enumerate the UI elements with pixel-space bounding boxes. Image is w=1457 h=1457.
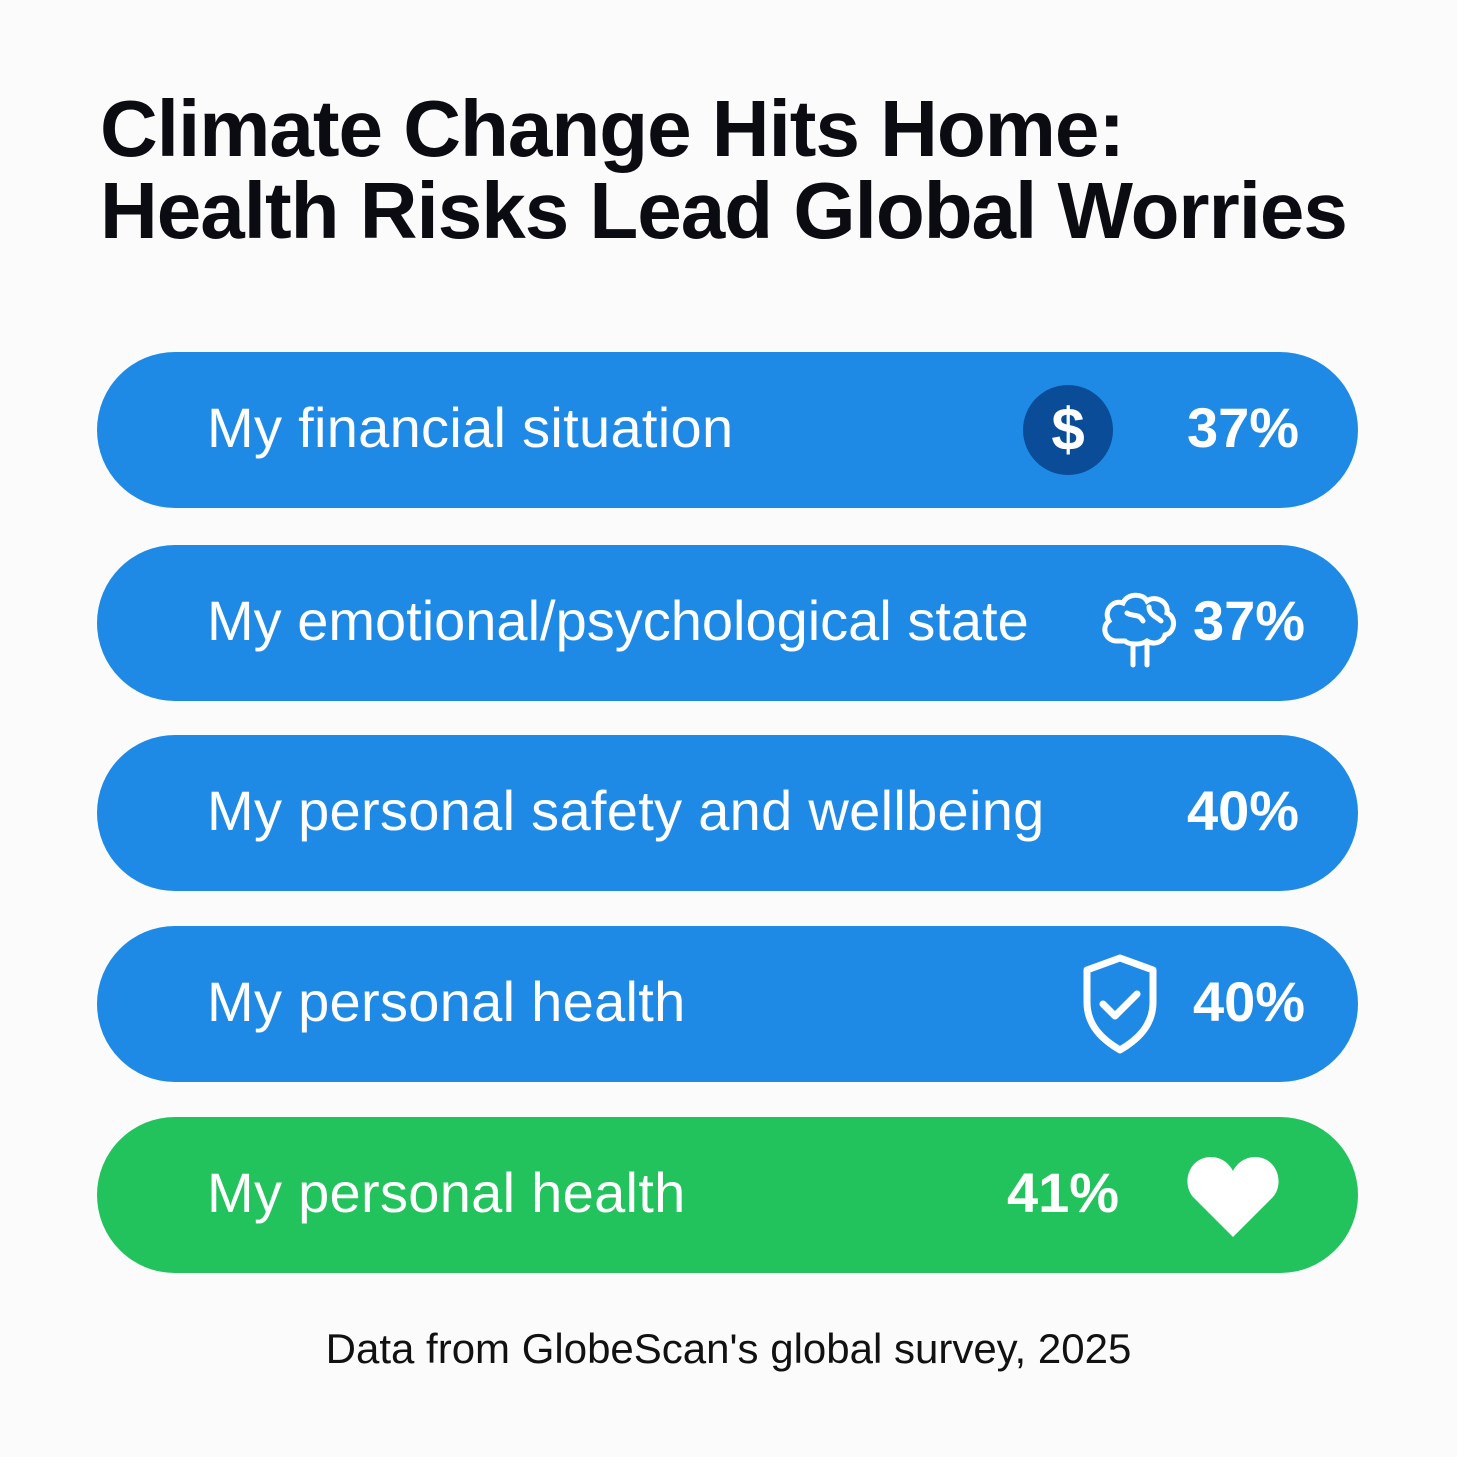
value: 40%: [1193, 970, 1305, 1033]
label: My personal health: [207, 970, 686, 1033]
title: Health Risks Lead Global Worries: [100, 166, 1347, 255]
value: 40%: [1187, 779, 1299, 842]
value: 41%: [1007, 1161, 1119, 1224]
value: 37%: [1187, 396, 1299, 459]
bar: health green: [97, 1117, 1358, 1273]
label: My personal health: [207, 1161, 686, 1224]
title: Climate Change Hits Home:: [100, 84, 1124, 173]
bar: financial: [97, 352, 1358, 508]
bar: health: [97, 926, 1358, 1082]
icon: heart: [1187, 1157, 1279, 1237]
title: [100, 84, 1347, 255]
icon: brain: [1102, 592, 1176, 668]
value: 37%: [1193, 589, 1305, 652]
label: My financial situation: [207, 396, 733, 459]
icon: shield: [1084, 954, 1156, 1054]
icon: dollar: [1023, 385, 1113, 475]
bar: safety: [97, 735, 1358, 891]
label: My emotional/psychological state: [207, 589, 1029, 652]
icon: dollar: $: [1051, 396, 1085, 463]
bar: emotional: [97, 545, 1358, 701]
footer source: Data from GlobeScan's global survey, 2025: [326, 1325, 1131, 1372]
label: My personal safety and wellbeing: [207, 779, 1045, 842]
